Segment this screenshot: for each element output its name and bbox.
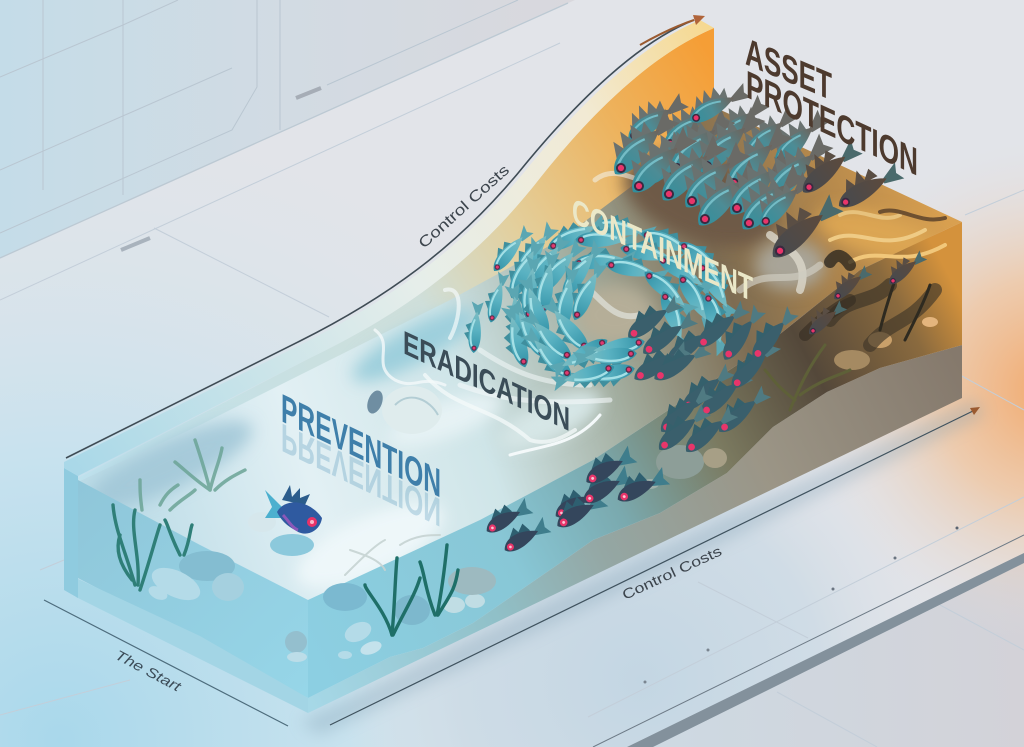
soft shadow under block: [300, 400, 985, 735]
label: ERADICATION: ERADICATION: [403, 325, 570, 439]
back wall rim: [64, 20, 714, 476]
dark invading fish front: [479, 440, 670, 557]
back wall panel with engineering grid: [0, 0, 575, 258]
front-right cut face: [308, 222, 962, 698]
axis label: the start: The Start: [113, 647, 185, 695]
label: CONTAINMENT: CONTAINMENT: [572, 190, 753, 309]
axis label: control costs upper: Control Costs: [415, 162, 513, 252]
axis: lower dimension line with arrow: [330, 407, 980, 725]
eradication zone rock: [364, 386, 442, 434]
fish school: swirl: [462, 209, 766, 397]
glass corner post: [64, 468, 78, 598]
axis label: control costs lower: Control Costs: [620, 543, 724, 603]
front-left glass face: [78, 480, 308, 698]
water surface and sand: [78, 107, 962, 600]
sand bed soft patches: [78, 135, 948, 604]
floor ledge strip: [593, 526, 1024, 747]
axis: the start dimension line: [44, 600, 288, 726]
seagrass plants: [113, 440, 458, 635]
fish school: top mass: [596, 72, 927, 338]
sediment base right side: [308, 345, 962, 713]
back wall inner face: [78, 28, 714, 490]
fish school: lower stream: [649, 301, 799, 457]
golden debris asset protection zone: [740, 210, 945, 410]
icon: lone blue invasive fish: [265, 485, 322, 556]
label: ASSET: ASSET: [745, 29, 832, 109]
label: PREVENTION reflection: PREVENTION: [281, 414, 441, 536]
sediment base left side: [76, 578, 308, 713]
control costs curve with arrow: [66, 15, 705, 458]
splashes across the water: [375, 173, 640, 455]
rocks left and front: [146, 317, 938, 662]
label: PROTECTION: PROTECTION: [746, 62, 918, 185]
label: PREVENTION: PREVENTION: [281, 385, 441, 506]
